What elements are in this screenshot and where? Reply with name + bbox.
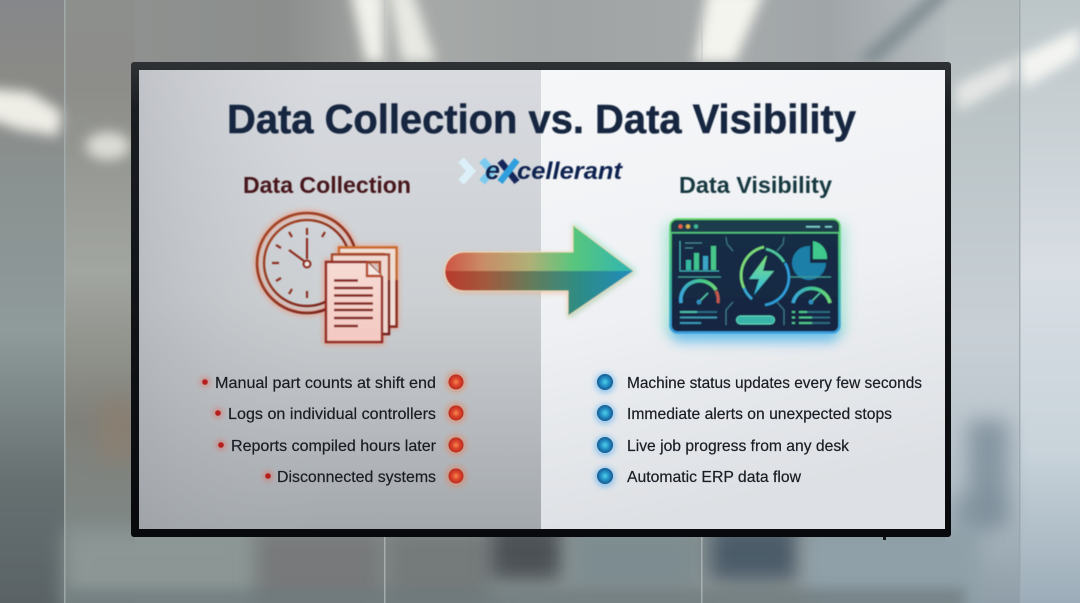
icon: live dashboard screen bbox=[664, 220, 846, 342]
dashboard dividers bbox=[678, 276, 831, 278]
item: logs on controllers bbox=[213, 403, 466, 423]
logo letter e: e bbox=[485, 155, 500, 185]
dashboard right gauge bbox=[793, 288, 830, 304]
item: ERP data flow: Automatic ERP data flow bbox=[627, 469, 801, 486]
item: logs on controllers: Logs on individual controllers bbox=[228, 406, 436, 423]
logo wordmark: cellerant bbox=[517, 158, 623, 185]
item: immediate alerts: Immediate alerts on unexpected stops bbox=[627, 406, 892, 423]
heading: Data Collection: Data Collection bbox=[243, 172, 411, 198]
item: machine status: Machine status updates every few seconds bbox=[627, 375, 922, 392]
screen: right panel background bbox=[541, 70, 945, 529]
dashboard pie chart bbox=[792, 241, 827, 280]
logo chevrons bbox=[461, 160, 517, 182]
list: data collection points bbox=[200, 372, 466, 486]
clock bbox=[257, 213, 357, 313]
dashboard button bbox=[736, 316, 774, 324]
list: data visibility points bbox=[595, 373, 922, 487]
item: live job progress: Live job progress from any desk bbox=[627, 438, 850, 455]
panel seams bbox=[64, 0, 66, 603]
dashboard left gauge bbox=[681, 281, 718, 304]
item: disconnected systems bbox=[263, 466, 466, 486]
screen: left panel background bbox=[139, 70, 541, 529]
documents bbox=[326, 248, 396, 342]
item: manual part counts bbox=[200, 372, 466, 392]
lower wall bbox=[65, 530, 265, 603]
item: reports compiled later: Reports compiled hours later bbox=[231, 438, 437, 455]
logo: excellerant bbox=[461, 155, 623, 185]
heading: Data Visibility: Data Visibility bbox=[679, 172, 832, 198]
item: disconnected systems: Disconnected systems bbox=[277, 469, 436, 486]
light streaks bbox=[350, 0, 384, 62]
item: manual part counts: Manual part counts at shift end bbox=[215, 375, 436, 392]
dashboard bar chart bbox=[680, 241, 719, 271]
item: reports compiled later bbox=[216, 435, 466, 455]
icon: clock and documents bbox=[257, 213, 396, 342]
arrow: transition from collection to visibility bbox=[444, 225, 634, 318]
dashboard title bar bbox=[671, 220, 839, 234]
dashboard status lines bbox=[680, 312, 830, 323]
dashboard lightning gauge bbox=[726, 237, 789, 325]
monitor frame bbox=[131, 62, 951, 540]
title: Data Collection vs. Data Visibility bbox=[227, 96, 856, 142]
